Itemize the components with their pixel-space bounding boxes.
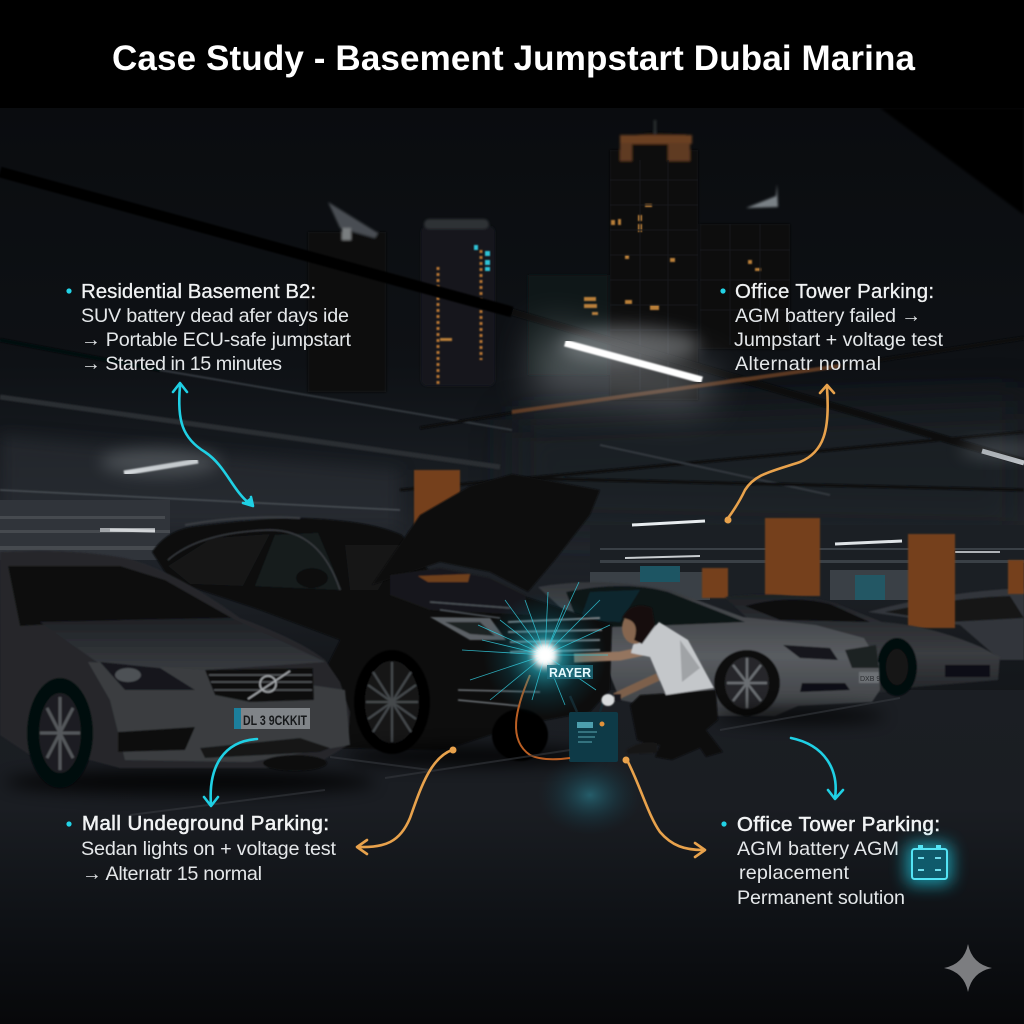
engine bay (390, 568, 530, 618)
arrow: orange to mall callout (357, 746, 456, 854)
callout: office tower parking, bottom right: replacement (739, 862, 850, 884)
city skyline towers (308, 120, 790, 400)
portable jump starter box (516, 675, 642, 835)
car floor shadows (5, 709, 885, 794)
callout: mall underground parking (66, 813, 337, 885)
callout: residential basement B2: → Started in 15 minutes (81, 353, 282, 375)
ceiling beams and pipes (0, 172, 1024, 510)
callout: office tower parking, bottom right: AGM battery AGM (737, 838, 899, 860)
parked SUV with open hood (152, 474, 612, 761)
callout: residential basement B2 (66, 281, 352, 375)
SUV front, wheel and grille (354, 617, 602, 761)
Volvo licence plate (234, 708, 310, 729)
arrow: cyan to mall parking (204, 739, 257, 806)
callout: residential basement B2: SUV battery dead afer days ide (81, 305, 349, 327)
far right parked car (868, 588, 1024, 660)
orange jumper cable (516, 675, 570, 759)
technician kneeling (574, 606, 723, 760)
arrow: cyan to office callout (791, 738, 843, 799)
silver sedan (538, 582, 880, 716)
callout: office tower parking, top right: AGM battery failed → (735, 305, 921, 327)
callout: mall underground parking: Sedan lights on + voltage test (81, 838, 336, 860)
callout: mall underground parking: → Alterıatr 15 normal (82, 863, 262, 885)
arrow: cyan to residential basement (173, 383, 253, 506)
dark sports car (725, 595, 1000, 696)
orange pillars (414, 470, 1024, 628)
icon: glowing battery (906, 843, 952, 885)
callout: mall underground parking: Mall Undeground Parking: (82, 813, 329, 835)
SUV licence plate: RAYER (549, 665, 592, 680)
grey Volvo sedan (0, 551, 350, 788)
ceiling lights (100, 325, 1024, 558)
callout: office tower parking, top right: Alternatr normal (735, 353, 881, 375)
silver sedan plate: DXB 9 (860, 676, 880, 683)
open car hood (372, 474, 600, 592)
callout: residential basement B2: → Portable ECU-safe jumpstart (81, 329, 352, 351)
title band: Case Study - Basement Jumpstart Dubai Marina (112, 39, 916, 78)
electric spark burst (462, 582, 610, 717)
callout: office tower parking, bottom right (721, 814, 940, 909)
callout: office tower parking, top right: Jumpstart + voltage test (734, 329, 944, 351)
callout: office tower parking, top right: Office Tower Parking: (735, 281, 934, 303)
callout: residential basement B2: Residential Basement B2: (81, 281, 316, 303)
icon: four-point sparkle watermark (944, 944, 992, 992)
title band (0, 0, 1024, 108)
callout: office tower parking, top right (720, 281, 944, 375)
Volvo licence plate: DL 3 9CKKIT (243, 712, 307, 728)
floor markings (130, 698, 900, 815)
callout: office tower parking, bottom right: Office Tower Parking: (737, 814, 940, 836)
arrow: orange to office callout (622, 756, 705, 857)
arrow: orange to office tower (724, 385, 834, 524)
callout: office tower parking, bottom right: Permanent solution (737, 887, 905, 909)
